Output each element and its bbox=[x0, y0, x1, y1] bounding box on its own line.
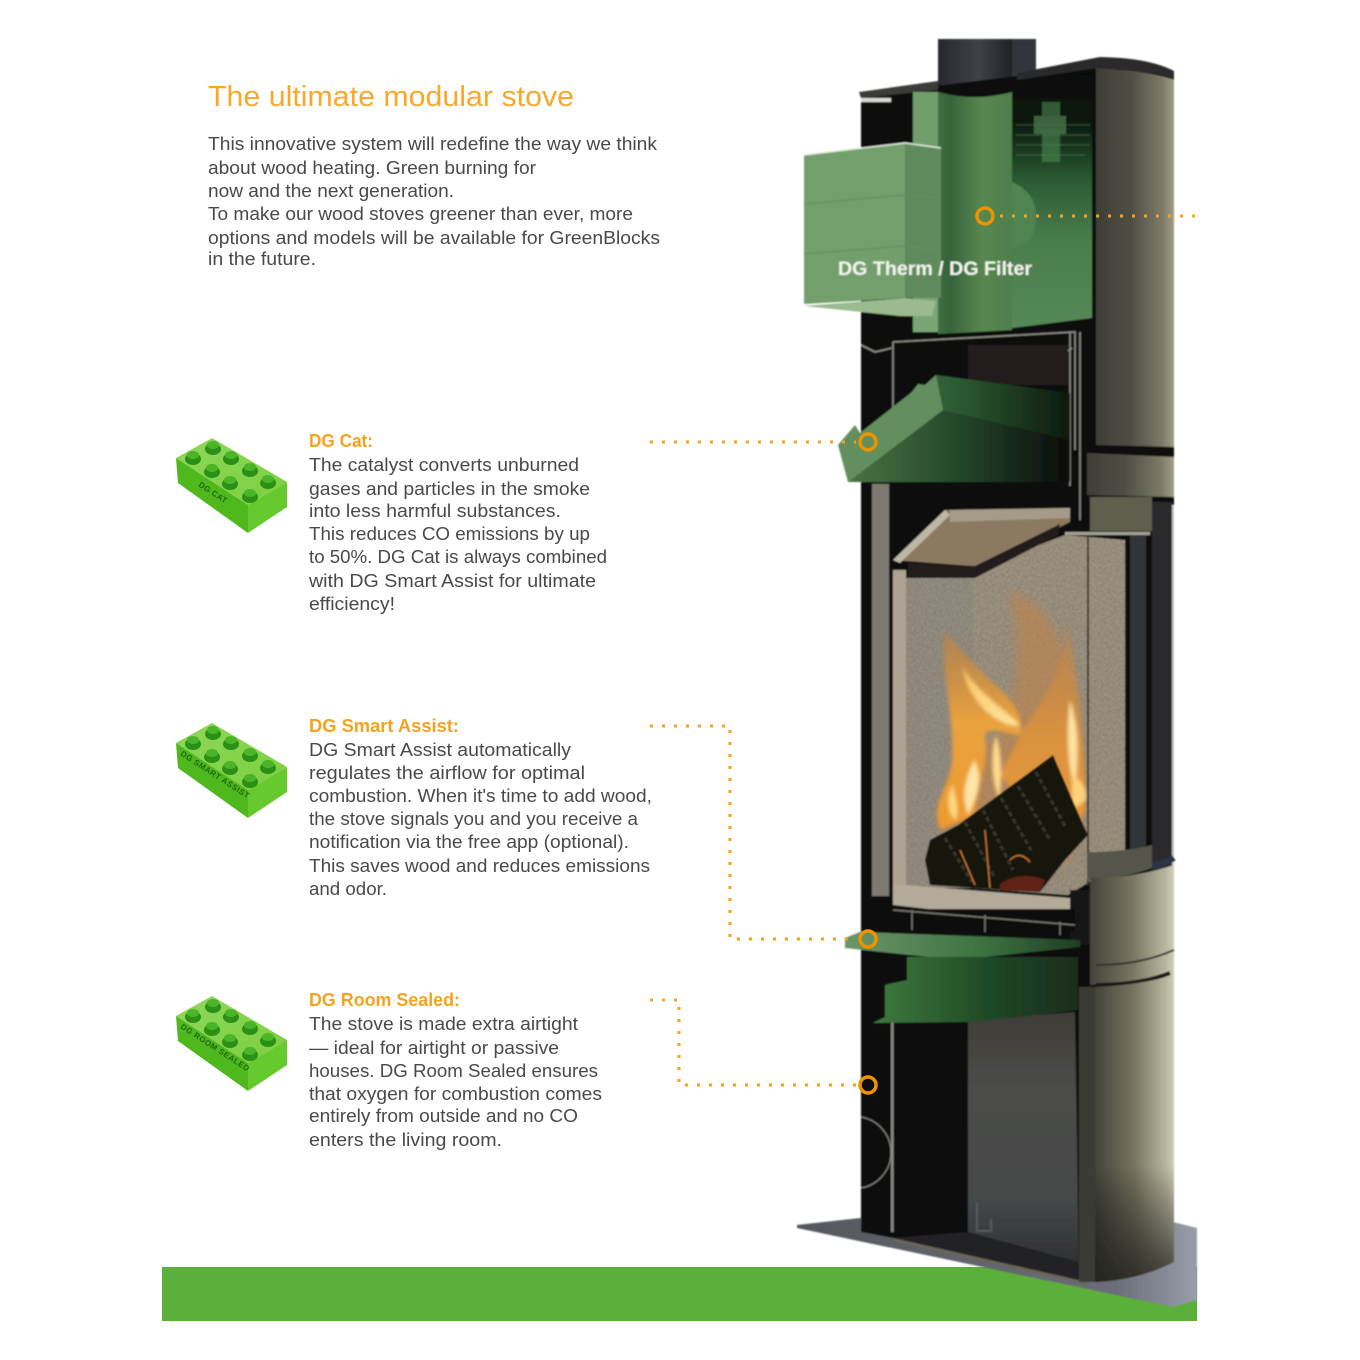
fire flames back bbox=[946, 590, 1083, 860]
green footer bar bbox=[162, 1267, 1197, 1321]
text block: DG Smart Assist: DG Smart Assist automatically bbox=[309, 740, 571, 760]
text block: DG Smart Assist: regulates the airflow for optimal bbox=[309, 763, 585, 783]
text block: DG Smart Assist: notification via the free app (optional). bbox=[309, 832, 629, 852]
text block: DG Room Sealed: — ideal for airtight or passive bbox=[309, 1038, 559, 1058]
intro text block: To make our wood stoves greener than ever, more bbox=[208, 204, 633, 224]
frame bottom rail bbox=[893, 909, 1075, 935]
right column lower band bbox=[1090, 858, 1174, 985]
green filter bulge bbox=[1012, 182, 1036, 250]
title: The ultimate modular stove bbox=[208, 81, 574, 113]
right column collar bbox=[1087, 453, 1174, 874]
stove body back bbox=[861, 66, 1174, 1282]
DG Cat front face bbox=[838, 375, 943, 482]
icon: green block DG Smart Assist bbox=[176, 723, 287, 818]
text block: DG Cat: DG Cat: bbox=[309, 431, 373, 451]
DG Cat rear dark side bbox=[848, 375, 1070, 482]
icon: green block DG Room Sealed bbox=[176, 996, 287, 1091]
DG Therm label: DG Therm / DG Filter bbox=[838, 259, 1033, 280]
burning log bbox=[925, 755, 1088, 892]
green lower duct bbox=[873, 957, 1078, 1023]
text block: DG Cat: This reduces CO emissions by up bbox=[309, 524, 590, 544]
text block: DG Cat: The catalyst converts unburned bbox=[309, 455, 579, 475]
right column base bbox=[1079, 975, 1174, 1282]
frame rail above firebox bbox=[1065, 532, 1150, 535]
firebox interior black bbox=[892, 486, 1072, 916]
icon: green block DG Room Sealed: DG ROOM SEALED bbox=[179, 1022, 251, 1073]
icon: green block DG Cat bbox=[176, 438, 287, 533]
right column upper bbox=[1096, 68, 1174, 447]
firebrick right face bbox=[973, 535, 1125, 895]
intro text block: options and models will be available for GreenBlocks bbox=[208, 228, 660, 248]
text block: DG Smart Assist: and odor. bbox=[309, 879, 387, 899]
intro text block: about wood heating. Green burning for bbox=[208, 158, 536, 178]
green filter module with fading interior bbox=[1012, 72, 1092, 328]
intro text block: This innovative system will redefine the way we think bbox=[208, 134, 658, 154]
text block: DG Smart Assist: the stove signals you and you receive a bbox=[309, 809, 639, 829]
text block: DG Cat bbox=[308, 431, 607, 614]
text block: DG Smart Assist: DG Smart Assist: bbox=[309, 716, 459, 736]
text block: DG Smart Assist bbox=[309, 716, 652, 899]
green shelf bbox=[845, 932, 1080, 960]
upper chamber shade bbox=[968, 345, 1068, 385]
icon: green block DG Smart Assist: DG SMART ASSIST bbox=[179, 749, 251, 800]
text block: DG Smart Assist: This saves wood and reduces emissions bbox=[309, 856, 650, 876]
text block: DG Room Sealed: The stove is made extra airtight bbox=[309, 1014, 578, 1034]
icon: green block DG Cat: DG CAT bbox=[197, 480, 229, 505]
firebrick left face bbox=[905, 578, 973, 888]
flue pipe bbox=[938, 39, 1036, 99]
DG Cat lower shadow bbox=[848, 410, 1070, 482]
door glass line bbox=[1087, 535, 1089, 885]
stove cutaway illustration bbox=[797, 39, 1197, 1307]
text block: DG Room Sealed: entirely from outside and no CO bbox=[309, 1106, 578, 1126]
top cap bbox=[859, 57, 1174, 102]
callout: DG Smart Assist leader bbox=[650, 726, 876, 947]
text block: DG Room Sealed: DG Room Sealed: bbox=[309, 990, 460, 1010]
green therm box bbox=[804, 143, 941, 316]
green filter internal detail bbox=[1016, 102, 1090, 162]
green side collar bbox=[913, 92, 938, 332]
intro text block: now and the next generation. bbox=[208, 181, 454, 201]
firebox grey collar bbox=[1087, 845, 1152, 880]
green main pipe bbox=[938, 92, 1012, 334]
fire flames main bbox=[937, 620, 1086, 850]
left grey stripe bbox=[872, 484, 889, 896]
text block: DG Cat: into less harmful substances. bbox=[309, 501, 561, 521]
callout: DG Cat leader bbox=[650, 434, 876, 450]
text block: DG Cat: efficiency! bbox=[309, 594, 395, 614]
callout: DG Therm / DG Filter leader bbox=[977, 208, 1196, 224]
callout: DG Room Sealed leader bbox=[650, 1000, 876, 1093]
text block: DG Room Sealed bbox=[309, 990, 602, 1150]
intro text block bbox=[208, 134, 660, 269]
text block: DG Room Sealed: houses. DG Room Sealed ensures bbox=[309, 1061, 598, 1081]
text block: DG Cat: gases and particles in the smoke bbox=[309, 479, 590, 499]
door frame bbox=[893, 570, 1090, 945]
intro text block: in the future. bbox=[208, 249, 316, 269]
chamber frame lines bbox=[861, 332, 1080, 520]
text block: DG Room Sealed: that oxygen for combustion comes bbox=[309, 1084, 602, 1104]
text block: DG Cat: with DG Smart Assist for ultimate bbox=[308, 571, 596, 591]
text block: DG Room Sealed: enters the living room. bbox=[309, 1130, 502, 1150]
text block: DG Cat: to 50%. DG Cat is always combined bbox=[309, 547, 607, 567]
lower compartment bbox=[861, 1012, 1087, 1285]
base plate bbox=[797, 1218, 1197, 1307]
door baffle top bbox=[893, 508, 1070, 578]
text block: DG Smart Assist: combustion. When it's time to add wood, bbox=[309, 786, 652, 806]
